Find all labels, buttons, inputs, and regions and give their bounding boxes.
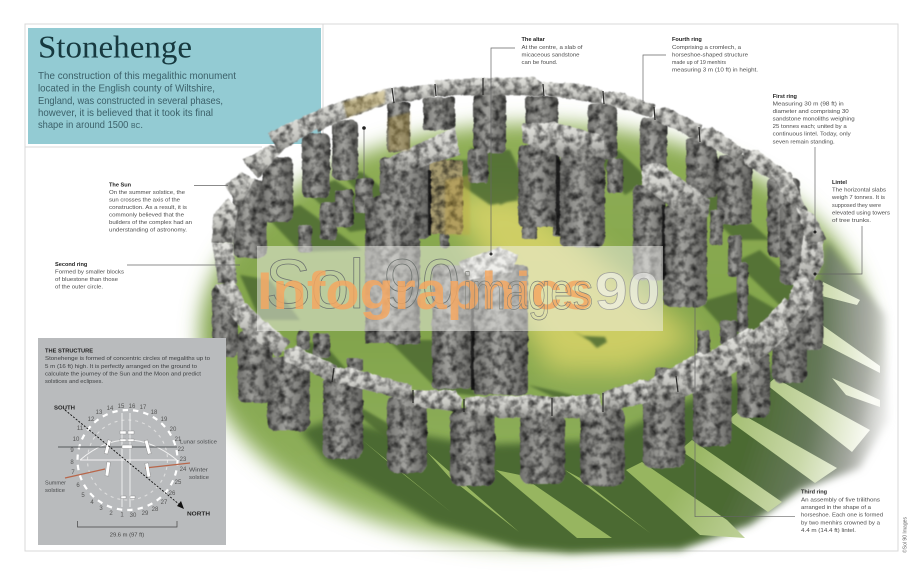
- callout: the altar: At the centre, a slab of: [522, 45, 583, 51]
- callout: fourth ring: Comprising a cromlech, a: [672, 45, 742, 51]
- lintel joints, front: [332, 368, 678, 416]
- inner bluestone circle: [88, 420, 168, 500]
- callout: third ring: Third ring: [801, 490, 828, 496]
- callout: the altar: can be found.: [522, 60, 558, 66]
- callout: lintel: weigh 7 tonnes. It is: [831, 195, 885, 201]
- callout: lintel: The horizontal slabs: [832, 187, 886, 193]
- stone numbers: 13: [96, 410, 103, 416]
- stone numbers: 20: [170, 427, 177, 433]
- callout: third ring: 4.4 m (14.4 ft) lintel.: [801, 528, 856, 534]
- callout: first ring: 25 tonnes each; united by a: [773, 124, 847, 130]
- stones: outer ring back uprights: [233, 93, 808, 285]
- callout: the sun: The Sun: [109, 182, 132, 188]
- structure heading: THE STRUCTURE: [45, 348, 93, 354]
- callout: the sun: [109, 126, 366, 234]
- title: Stonehenge: [38, 28, 192, 64]
- trilithon: right: [633, 163, 710, 307]
- callout: first ring: Measuring 30 m (98 ft) in: [773, 102, 844, 108]
- solstice labels: Winter: [189, 468, 208, 474]
- callout: third ring: arranged in the shape of a: [801, 505, 872, 511]
- stone numbers: 15: [118, 404, 125, 410]
- stone numbers: [70, 404, 187, 519]
- callout: third ring: [695, 300, 883, 534]
- stone numbers: 3: [99, 506, 103, 512]
- callout: the altar: The altar: [522, 37, 546, 43]
- callout: lintel: elevated using towers: [832, 210, 890, 216]
- structure text: solstices and eclipses.: [45, 379, 103, 385]
- callout: lintel: Lintel: [832, 180, 847, 186]
- callout: fourth ring: measuring 3 m (10 ft) in height.: [672, 68, 758, 74]
- callout: first ring: continuous lintel. Today, only: [773, 132, 851, 138]
- callout: the sun: construction. As a result, it is: [109, 205, 187, 211]
- callout: the sun: sun crosses the axis of the: [109, 197, 180, 203]
- stone numbers: 26: [169, 491, 176, 497]
- callout: the sun: commonly believed that the: [109, 213, 184, 219]
- solstice labels: Lunar solstice: [180, 440, 217, 446]
- trilithon: back centre: [518, 122, 605, 247]
- stone numbers: 6: [76, 483, 80, 489]
- outer sarsen circle: [78, 410, 178, 510]
- callout: first ring: seven remain standing.: [773, 140, 835, 146]
- compass labels: NORTH: [187, 512, 210, 518]
- watermark outlined wordmark: Sol 90: [265, 245, 460, 323]
- callout: second ring: [55, 262, 240, 291]
- callout: second ring: Second ring: [55, 262, 88, 268]
- stone numbers: 28: [152, 507, 159, 513]
- watermark outlined images: images: [463, 263, 593, 321]
- stone numbers: 12: [88, 417, 95, 423]
- site plan diagram: [45, 404, 217, 538]
- callout: lintel: of tree trunks.: [832, 218, 871, 224]
- callout: the altar: micaceous sandstone: [522, 52, 580, 58]
- callout: the sun: understanding of astronomy.: [109, 228, 187, 234]
- stone numbers: 19: [161, 417, 168, 423]
- stone numbers: 4: [90, 500, 94, 506]
- structure text: Stonehenge is formed of concentric circles of megaliths up to: [45, 356, 210, 362]
- stone numbers: 7: [71, 470, 75, 476]
- introduction text: [38, 71, 236, 131]
- stone numbers: 10: [73, 437, 80, 443]
- sunlight band on grass: [445, 190, 700, 372]
- lunar solstice line: [58, 446, 177, 448]
- stones: outer ring front lintels: [212, 205, 826, 418]
- stone numbers: 29: [142, 511, 149, 517]
- trilithon: front left: [365, 193, 420, 343]
- introduction text: however, it is believed that it took its final: [38, 108, 213, 119]
- stones: sarsen trilithons: [365, 122, 710, 395]
- introduction text: located in the English county of Wiltshire,: [38, 84, 215, 94]
- stone numbers: 2: [109, 511, 113, 517]
- image credit: ©Sol 90 Images: [902, 517, 908, 553]
- compass labels: [54, 406, 210, 518]
- stones: outer ring front uprights: [212, 280, 823, 486]
- callout: lintel: supposed they were: [832, 203, 881, 209]
- callout: third ring: horseshoe. Each one is formed: [801, 513, 883, 519]
- stone shadows on grass: [240, 148, 888, 553]
- trilithon: back left: [380, 127, 463, 239]
- callout: first ring: diameter and comprising 30: [773, 109, 849, 115]
- stone numbers: 9: [70, 448, 74, 454]
- callout: fourth ring: [643, 37, 758, 101]
- panel: the structure: [38, 338, 226, 545]
- stone numbers: 11: [77, 426, 84, 432]
- stone numbers: 25: [175, 480, 182, 486]
- callout: lintel: [814, 180, 890, 276]
- callout: first ring: First ring: [773, 94, 798, 100]
- callout: second ring: of bluestone than those: [55, 277, 118, 283]
- structure text: calculate the journey of the Sun and the Moon and predict: [45, 372, 201, 378]
- solstice labels: solstice: [189, 475, 209, 481]
- scale bar: 29.6 m (97 ft): [110, 532, 144, 538]
- north-south arrow: [65, 410, 184, 509]
- introduction text: England, was constructed in several phases,: [38, 96, 223, 107]
- stone numbers: 16: [129, 404, 136, 410]
- stone numbers: 5: [81, 493, 85, 499]
- stone numbers: 30: [130, 513, 137, 519]
- solstice lines: [65, 463, 190, 478]
- stone numbers: 27: [161, 500, 168, 506]
- trilithon: front centre: [432, 265, 528, 395]
- stone numbers: 14: [107, 406, 114, 412]
- callout: the altar: [490, 37, 583, 256]
- panel: title and introduction: [28, 28, 321, 144]
- watermark: [257, 245, 663, 331]
- watermark white 90: 90: [595, 263, 660, 321]
- interior shadows: [240, 148, 815, 445]
- callout: first ring: [773, 94, 855, 234]
- introduction text: The construction of this megalithic monument: [38, 71, 236, 82]
- callout: fourth ring: horseshoe-shaped structure: [672, 52, 748, 58]
- callout: the sun: On the summer solstice, the: [109, 190, 185, 196]
- scale bar: [78, 521, 177, 538]
- altar stone: [458, 247, 518, 280]
- solstice labels: solstice: [45, 488, 65, 494]
- callout: the sun: builders of the complex had an: [109, 220, 192, 226]
- stone numbers: 18: [151, 410, 158, 416]
- callout: second ring: of the outer circle.: [55, 285, 103, 291]
- stone numbers: 17: [140, 405, 147, 411]
- lit strips between shadows: [362, 282, 880, 538]
- stone numbers: 24: [180, 467, 187, 473]
- structure text: 5 m (16 ft) high. It is perfectly arranged on the ground to: [45, 364, 197, 370]
- introduction text: shape in around 1500 BC.: [38, 120, 143, 131]
- lintel joints, back: [392, 78, 700, 142]
- callout: third ring: An assembly of five trilithons: [801, 497, 880, 503]
- axis lines: [80, 413, 177, 507]
- stone numbers: 22: [178, 447, 185, 453]
- callout: third ring: by two menhirs crowned by a: [801, 520, 881, 526]
- structure text: [45, 356, 210, 385]
- stones: outer ring back lintels: [212, 77, 805, 243]
- stone numbers: 21: [175, 437, 182, 443]
- solstice labels: Summer: [45, 480, 66, 486]
- stone numbers: 8: [70, 460, 74, 466]
- horseshoe stones: [104, 431, 151, 498]
- ground: grass disc: [200, 123, 870, 547]
- stone numbers: 23: [180, 457, 187, 463]
- sun tint on stones: [343, 90, 470, 235]
- stone numbers: 1: [120, 512, 124, 518]
- callout: fourth ring: made up of 19 menhirs: [672, 60, 726, 66]
- watermark orange wordmark: Infographics: [257, 262, 593, 321]
- callout: fourth ring: Fourth ring: [672, 37, 702, 43]
- compass labels: SOUTH: [54, 406, 75, 412]
- stones: bluestone inner circle, back: [297, 149, 748, 379]
- solstice labels: [45, 440, 217, 494]
- callout: second ring: Formed by smaller blocks: [55, 269, 124, 275]
- callout: first ring: sandstone monoliths weighing: [773, 117, 855, 123]
